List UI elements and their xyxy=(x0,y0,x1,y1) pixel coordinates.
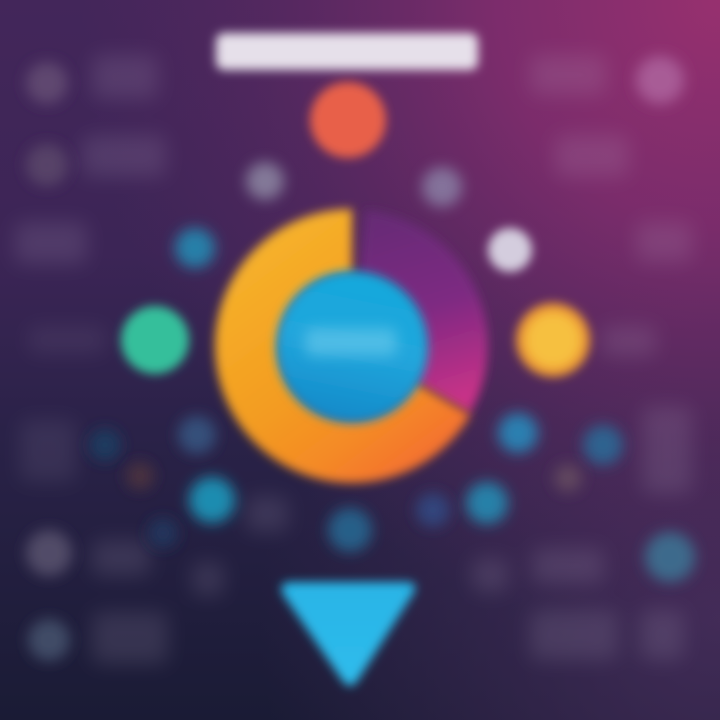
node: lower left xyxy=(178,416,216,454)
node: left second xyxy=(26,144,68,186)
node: dim blue lower left xyxy=(148,518,178,548)
donut segment: orange xyxy=(248,242,442,450)
node: dim orange xyxy=(126,462,154,490)
donut chart xyxy=(248,242,455,450)
node: lower right blue xyxy=(498,413,538,453)
node: upper right xyxy=(422,167,462,207)
node: far lower right blue xyxy=(583,425,623,465)
node: cyan right xyxy=(466,482,508,524)
faded side labels xyxy=(15,55,692,664)
node: left blue xyxy=(175,228,215,268)
node: upper left xyxy=(246,162,284,200)
small nodes xyxy=(26,56,695,661)
center label xyxy=(305,328,397,356)
node: right light xyxy=(488,228,532,272)
icon: yellow circle xyxy=(516,303,590,377)
node: cyan left xyxy=(189,477,235,523)
node: left grey xyxy=(26,530,72,576)
icon: blue down triangle xyxy=(281,582,415,686)
title bar xyxy=(216,33,478,70)
node: top right pink xyxy=(636,56,684,104)
node: far right teal xyxy=(645,532,695,582)
icon: red circle xyxy=(310,82,386,158)
node: lower center right xyxy=(416,493,450,527)
node: lower left small xyxy=(89,429,121,461)
node: bottom left xyxy=(28,619,70,661)
icon: green circle xyxy=(121,306,189,374)
donut segment: purple xyxy=(362,243,455,397)
center circle xyxy=(276,271,428,423)
node: top left xyxy=(26,62,68,104)
node: dim orange right xyxy=(554,464,582,492)
node: center xyxy=(328,508,372,552)
